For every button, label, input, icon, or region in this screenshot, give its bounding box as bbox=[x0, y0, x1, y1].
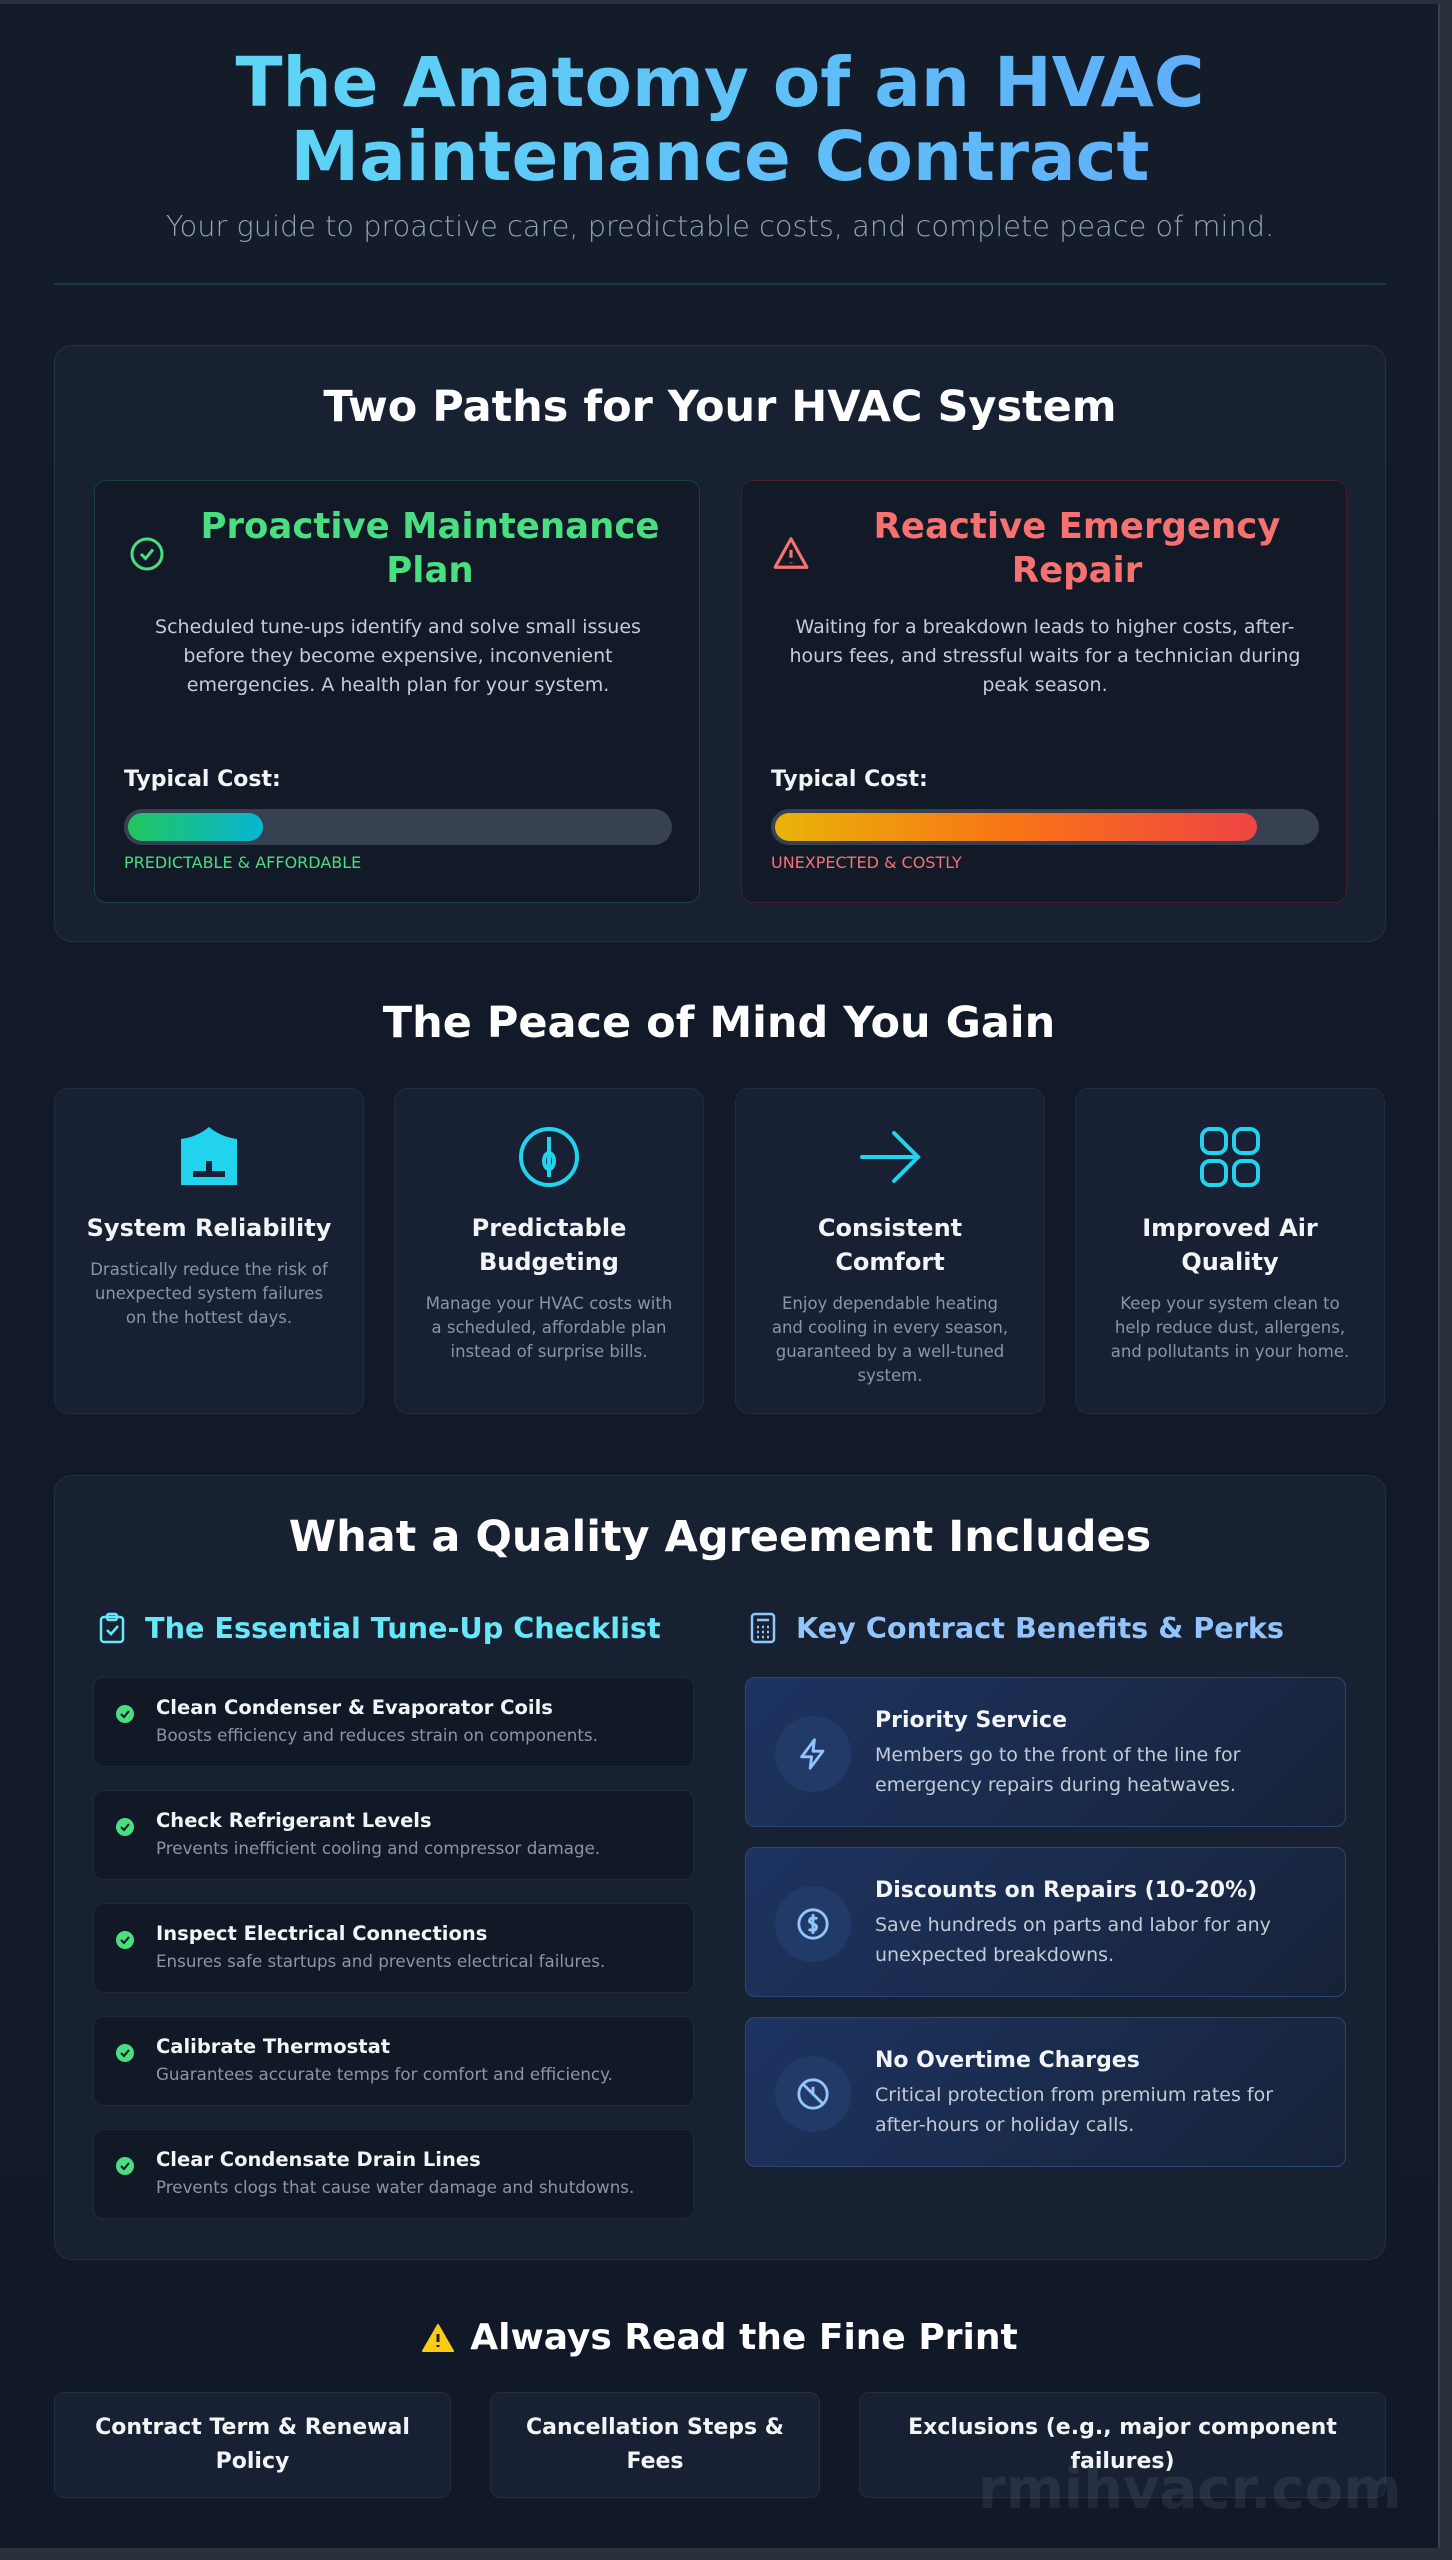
benefit: air quality: Keep your system clean to help reduce dust, allergens, and pollutants in your home. bbox=[1111, 1294, 1349, 1361]
heading: peace of mind: The Peace of Mind You Gain bbox=[383, 998, 1055, 1048]
benefit: reliability: System Reliability bbox=[87, 1214, 331, 1242]
heading: proactive bbox=[200, 506, 660, 591]
perk: discounts: Discounts on Repairs (10-20%) bbox=[875, 1878, 1257, 1903]
benefit: comfort: Enjoy dependable heating and cooling in every season, guaranteed by a well-tuned system. bbox=[772, 1294, 1008, 1385]
item: thermostat: Calibrate Thermostat bbox=[156, 2035, 390, 2058]
card: proactive bbox=[94, 480, 700, 903]
bar: low cost bbox=[124, 809, 672, 845]
benefit: budgeting bbox=[394, 1088, 704, 1414]
benefit: air quality bbox=[1075, 1088, 1385, 1414]
subtitle: Your guide to proactive care, predictable costs, and complete peace of mind. bbox=[166, 209, 1274, 243]
item: drain: Prevents clogs that cause water damage and shutdowns. bbox=[156, 2177, 634, 2197]
perk: discounts bbox=[745, 1847, 1346, 1997]
item: thermostat: Guarantees accurate temps for comfort and efficiency. bbox=[156, 2064, 613, 2084]
card: reactive bbox=[741, 480, 1347, 903]
card: reactive: Typical Cost: bbox=[771, 767, 928, 792]
bar: high cost bbox=[771, 809, 1319, 845]
item: electrical: Inspect Electrical Connections bbox=[156, 1922, 487, 1945]
heading: proactive: Plan bbox=[386, 550, 474, 591]
item: refrigerant bbox=[93, 1790, 694, 1880]
item: drain bbox=[93, 2129, 694, 2219]
benefit: reliability bbox=[54, 1088, 364, 1414]
benefit: comfort: Consistent bbox=[818, 1214, 962, 1242]
perk: discounts: Save hundreds on parts and labor for any unexpected breakdowns. bbox=[875, 1914, 1271, 1966]
heading: agreement: What a Quality Agreement Includes bbox=[289, 1512, 1151, 1562]
heading: reactive bbox=[874, 506, 1280, 591]
fine print: term: Contract Term & Renewal Policy bbox=[95, 2415, 410, 2474]
icon: warning bbox=[774, 537, 808, 569]
card: reactive: UNEXPECTED & COSTLY bbox=[771, 853, 962, 872]
benefit: budgeting: Budgeting bbox=[479, 1248, 619, 1276]
subheading: perks: Key Contract Benefits & Perks bbox=[796, 1611, 1284, 1645]
item: coils bbox=[93, 1677, 694, 1767]
checklist items bbox=[94, 1678, 693, 2218]
benefit: air quality: Improved Air bbox=[1142, 1214, 1318, 1242]
title bbox=[0, 46, 1440, 194]
benefit: budgeting: Predictable bbox=[472, 1214, 626, 1242]
benefit: air quality: Quality bbox=[1181, 1248, 1279, 1276]
fine print: cancellation bbox=[490, 2392, 820, 2498]
panel: benefits row bbox=[54, 1088, 1385, 1414]
item: coils: Boosts efficiency and reduces strain on components. bbox=[156, 1725, 598, 1745]
item: electrical: Ensures safe startups and prevents electrical failures. bbox=[156, 1951, 605, 1971]
benefit: budgeting: Manage your HVAC costs with a scheduled, affordable plan instead of surprise bills. bbox=[426, 1294, 672, 1361]
panel: two paths bbox=[54, 345, 1386, 942]
subheading: checklist: The Essential Tune-Up Checklist bbox=[145, 1611, 661, 1645]
heading: two paths: Two Paths for Your HVAC System bbox=[323, 382, 1117, 432]
perks bbox=[745, 1677, 1346, 2167]
item: drain: Clear Condensate Drain Lines bbox=[156, 2148, 481, 2171]
heading: proactive: Proactive Maintenance bbox=[200, 506, 660, 547]
item: thermostat bbox=[93, 2016, 694, 2106]
perk: priority: Priority Service bbox=[875, 1708, 1067, 1733]
heading: reactive: Repair bbox=[1012, 550, 1142, 591]
perk: no overtime: No Overtime Charges bbox=[875, 2048, 1140, 2073]
item: refrigerant: Prevents inefficient cooling and compressor damage. bbox=[156, 1838, 600, 1858]
fine print: exclusions bbox=[859, 2392, 1386, 2498]
title: Maintenance Contract bbox=[291, 117, 1149, 197]
perk: priority bbox=[745, 1677, 1346, 1827]
perk: no overtime bbox=[745, 2017, 1346, 2167]
item: coils: Clean Condenser & Evaporator Coils bbox=[156, 1696, 553, 1719]
benefit: comfort: Comfort bbox=[835, 1248, 945, 1276]
watermark: rmihvacr.com bbox=[978, 2457, 1401, 2522]
benefit: comfort bbox=[735, 1088, 1045, 1414]
text: Waiting for a breakdown leads to higher costs, after-hours fees, and stressful waits for a technician during peak season. bbox=[790, 616, 1300, 696]
heading: fine print: Always Read the Fine Print bbox=[470, 2317, 1018, 2358]
title: The Anatomy of an HVAC bbox=[235, 43, 1205, 123]
fine print: cancellation: Cancellation Steps & Fees bbox=[526, 2415, 784, 2474]
perk: priority: Members go to the front of the line for emergency repairs during heatwaves. bbox=[875, 1744, 1240, 1796]
item: refrigerant: Check Refrigerant Levels bbox=[156, 1809, 432, 1832]
icon: check circle bbox=[130, 538, 164, 570]
text: Scheduled tune-ups identify and solve small issues before they become expensive, inconvenient emergencies. A health plan for your system. bbox=[155, 616, 641, 696]
fine print: term bbox=[54, 2392, 451, 2498]
panel: agreement bbox=[54, 1475, 1386, 2260]
benefit: reliability: Drastically reduce the risk of unexpected system failures on the hottest days. bbox=[90, 1260, 328, 1327]
fine print: exclusions: Exclusions (e.g., major component failures) bbox=[908, 2415, 1337, 2474]
card: proactive: PREDICTABLE & AFFORDABLE bbox=[124, 853, 361, 872]
perk: no overtime: Critical protection from premium rates for after-hours or holiday calls. bbox=[875, 2084, 1273, 2136]
item: electrical bbox=[93, 1903, 694, 1993]
card: proactive: Typical Cost: bbox=[124, 767, 281, 792]
heading: reactive: Reactive Emergency bbox=[874, 506, 1280, 547]
